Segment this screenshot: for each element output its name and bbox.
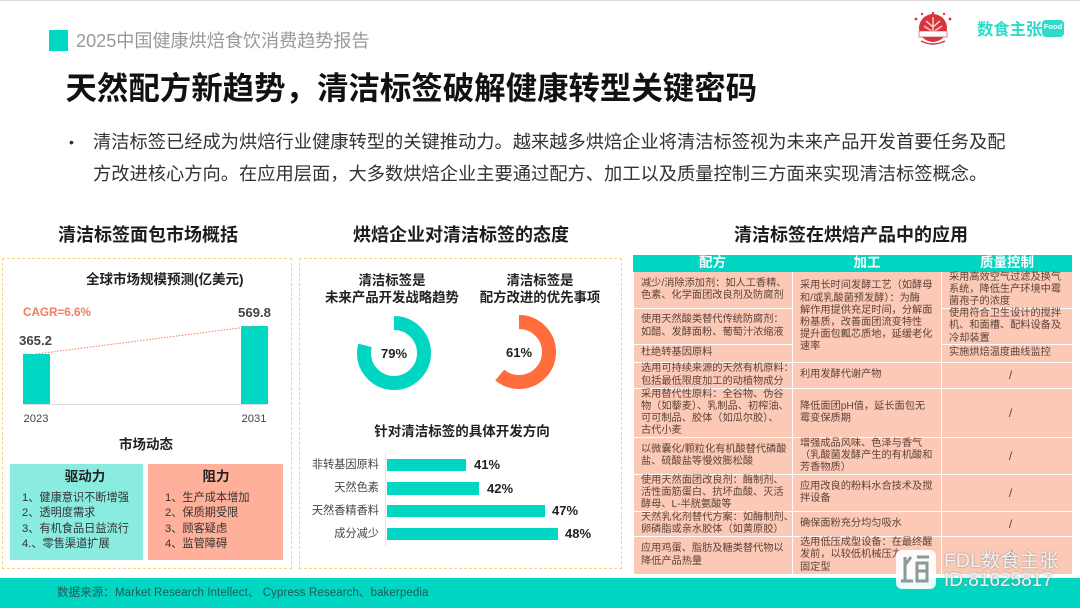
panel: barriers [148, 464, 283, 560]
bar chart: market size: 365.2 [19, 333, 52, 348]
text: 实施烘焙温度曲线监控 [949, 347, 1051, 358]
text: 选用可持续来源的天然有机原料： [641, 363, 794, 374]
heading: market overview: 清洁标签面包市场概括 [58, 225, 238, 245]
panel: attitude [299, 258, 622, 569]
donut: 79%: 79% [381, 346, 407, 361]
table header [633, 255, 1072, 272]
data source: 数据来源：Market Research Intellect、 Cypress Research、bakerpedia [57, 587, 428, 599]
text: 和/或乳酸菌预发酵）：为酶 [800, 293, 920, 304]
text: 发前，以较低机械压力 [800, 549, 902, 560]
heading: market dynamics: 市场动态 [119, 437, 173, 452]
text: 确保面粉充分均匀吸水 [800, 518, 902, 529]
text: 采用高效空气过滤及换气 [949, 272, 1061, 283]
text: 机、和面槽、配料设备及 [949, 320, 1061, 331]
intro text [69, 131, 1006, 184]
text: 42% [487, 481, 513, 496]
text: 使用天然面团改良剂：酶制剂、 [641, 475, 784, 486]
text: 配方 [699, 255, 726, 270]
bar chart: market size [19, 305, 271, 425]
text: 卵磷脂或亲水胶体（如黄原胶） [641, 524, 784, 535]
text: 采用长时间发酵工艺（如酵母 [800, 280, 932, 291]
logo: association emblem [914, 12, 952, 45]
logo: brand wordmark: Food [1044, 22, 1062, 31]
heading: attitude: 烘焙企业对清洁标签的态度 [353, 225, 569, 245]
text: 拌设备 [800, 493, 831, 504]
text: 质量控制 [980, 255, 1034, 270]
text: / [1009, 449, 1012, 463]
text: 物（如藜麦）、乳制品、初榨油、 [641, 401, 789, 412]
heading: application: 清洁标签在烘焙产品中的应用 [734, 225, 968, 245]
text: / [1009, 406, 1012, 420]
text: 菌孢子的浓度 [949, 296, 1010, 307]
watermark text: FDL数食主张 [944, 550, 1059, 572]
table: clean label applications [633, 255, 1072, 272]
bar row: 48%: 成分减少 [334, 528, 379, 540]
text: 系统，降低生产环境中霉 [949, 284, 1061, 295]
donut: 61% [495, 315, 556, 389]
text: 加工 [854, 255, 880, 270]
text: 霉变保质期 [800, 413, 851, 424]
report name: 2025中国健康烘焙食饮消费趋势报告 [76, 31, 370, 51]
text: 利用发酵代谢产物 [800, 369, 882, 380]
text: 增强成品风味、色泽与香气 [800, 438, 922, 449]
drivers list: 2、透明度需求 [22, 507, 95, 519]
donut title: strategic trend [325, 273, 459, 305]
text: 粉基质，改善面团流变特性 [800, 317, 922, 328]
watermark text: ID:81625817 [944, 570, 1053, 591]
text: 减少/消除添加剂：如人工香精、 [641, 278, 786, 289]
intro text: 方改进核心方向。在应用层面，大多数烘焙企业主要通过配方、加工以及质量控制三方面来实现清洁标签概念。 [93, 163, 987, 184]
barriers list: 1、生产成本增加 [165, 492, 250, 504]
barriers list: 4、监管障碍 [165, 538, 227, 550]
text: 如醋、发酵面粉、葡萄汁浓缩液 [641, 326, 784, 338]
bar chart: development directions [385, 452, 386, 546]
donut: 61%: 61% [506, 345, 532, 360]
text: 速率 [800, 341, 820, 352]
bar row: 47%: 天然香精香料 [312, 505, 379, 517]
title: 天然配方新趋势，清洁标签破解健康转型关键密码 [66, 71, 757, 106]
text: 选用低压成型设备：在最终醒 [800, 537, 932, 548]
watermark icon [896, 550, 936, 589]
text: 41% [474, 457, 500, 472]
drivers list: 1、健康意识不断增强 [22, 492, 129, 504]
text: 可可制品、胶体（如瓜尔胶）、 [641, 413, 779, 424]
intro text: • [69, 134, 74, 150]
drivers list [22, 491, 129, 550]
text: / [1009, 486, 1012, 500]
panel: market overview [2, 258, 292, 569]
text: 以微囊化/颗粒化有机酸替代磷酸 [641, 444, 786, 455]
bar chart: market size: CAGR=6.6% [23, 306, 91, 319]
text: 提升面包瓤芯质地，延缓老化 [800, 329, 932, 340]
text: 色素、化学面团改良剂及防腐剂 [641, 290, 784, 301]
text: 使用符合卫生设计的搅拌 [949, 308, 1061, 319]
text: 使用天然酸类替代传统防腐剂： [641, 314, 784, 325]
text: 芳香物质） [800, 462, 851, 473]
drivers heading: 驱动力 [65, 469, 105, 484]
donut title: strategic trend: 清洁标签是 [359, 273, 425, 288]
text: / [1009, 368, 1012, 382]
text: 48% [565, 526, 591, 541]
chart heading: development directions: 针对清洁标签的具体开发方向 [374, 424, 550, 439]
text: 解作用提供充足时间，分解面 [800, 305, 932, 316]
text: 应用改良的粉料水合技术及搅 [800, 481, 932, 492]
chart title: 全球市场规模预测(亿美元) [86, 272, 244, 287]
donut title: priority [480, 273, 600, 305]
barriers heading: 阻力 [202, 469, 230, 484]
text: 固定型 [800, 562, 831, 573]
text: 降低产品热量 [641, 556, 702, 566]
text: 杜绝转基因原料 [641, 347, 712, 358]
text: 古代小麦 [641, 425, 682, 436]
donut title: priority: 配方改进的优先事项 [480, 290, 600, 305]
drivers list: 4.、零售渠道扩展 [22, 538, 110, 550]
text: 活性面筋蛋白、抗坏血酸、灭活 [641, 487, 784, 498]
intro text: 清洁标签已经成为烘焙行业健康转型的关键推动力。越来越多烘焙企业将清洁标签视为未来产品开发首要任务及配 [93, 131, 1006, 152]
text: 降低面团pH值，延长面包无 [800, 401, 925, 412]
logo: brand wordmark: 数食主张 [977, 21, 1042, 39]
watermark text [944, 550, 1059, 591]
bar chart: market size: 569.8 [238, 305, 271, 320]
bar row: 42%: 天然色素 [334, 482, 379, 494]
text: 盐、硫酸盐等慢效膨松酸 [641, 456, 753, 467]
barriers list: 2、保质期受限 [165, 507, 238, 519]
barriers list: 3、顾客疑虑 [165, 523, 227, 535]
text: 包括最低限度加工的动植物成分 [641, 376, 784, 386]
donut title: strategic trend: 未来产品开发战略趋势 [325, 290, 459, 305]
text: 采用替代性原料：全谷物、伪谷 [641, 389, 784, 400]
text: 47% [552, 503, 578, 518]
bar chart: market size: 2023 [24, 413, 48, 425]
drivers list: 3、有机食品日益流行 [22, 523, 129, 535]
bar chart: market size: 2031 [242, 413, 266, 425]
barriers list [165, 491, 250, 550]
donut title: priority: 清洁标签是 [507, 273, 573, 288]
donut: 79% [357, 316, 431, 390]
text: 应用鸡蛋、脂肪及糖类替代物以 [641, 543, 784, 554]
bar row: 41%: 非转基因原料 [312, 459, 379, 471]
text: 天然乳化剂替代方案：如酶制剂、 [641, 512, 794, 523]
text: （乳酸菌发酵产生的有机酸和 [800, 450, 932, 461]
text: / [1009, 517, 1012, 531]
text: / [1009, 548, 1012, 562]
text: 酵母、L-半胱氨酸等 [641, 499, 732, 510]
panel: drivers [10, 464, 143, 560]
text: 冷却装置 [949, 333, 990, 344]
footer band [0, 578, 1080, 608]
header marker [49, 30, 68, 51]
